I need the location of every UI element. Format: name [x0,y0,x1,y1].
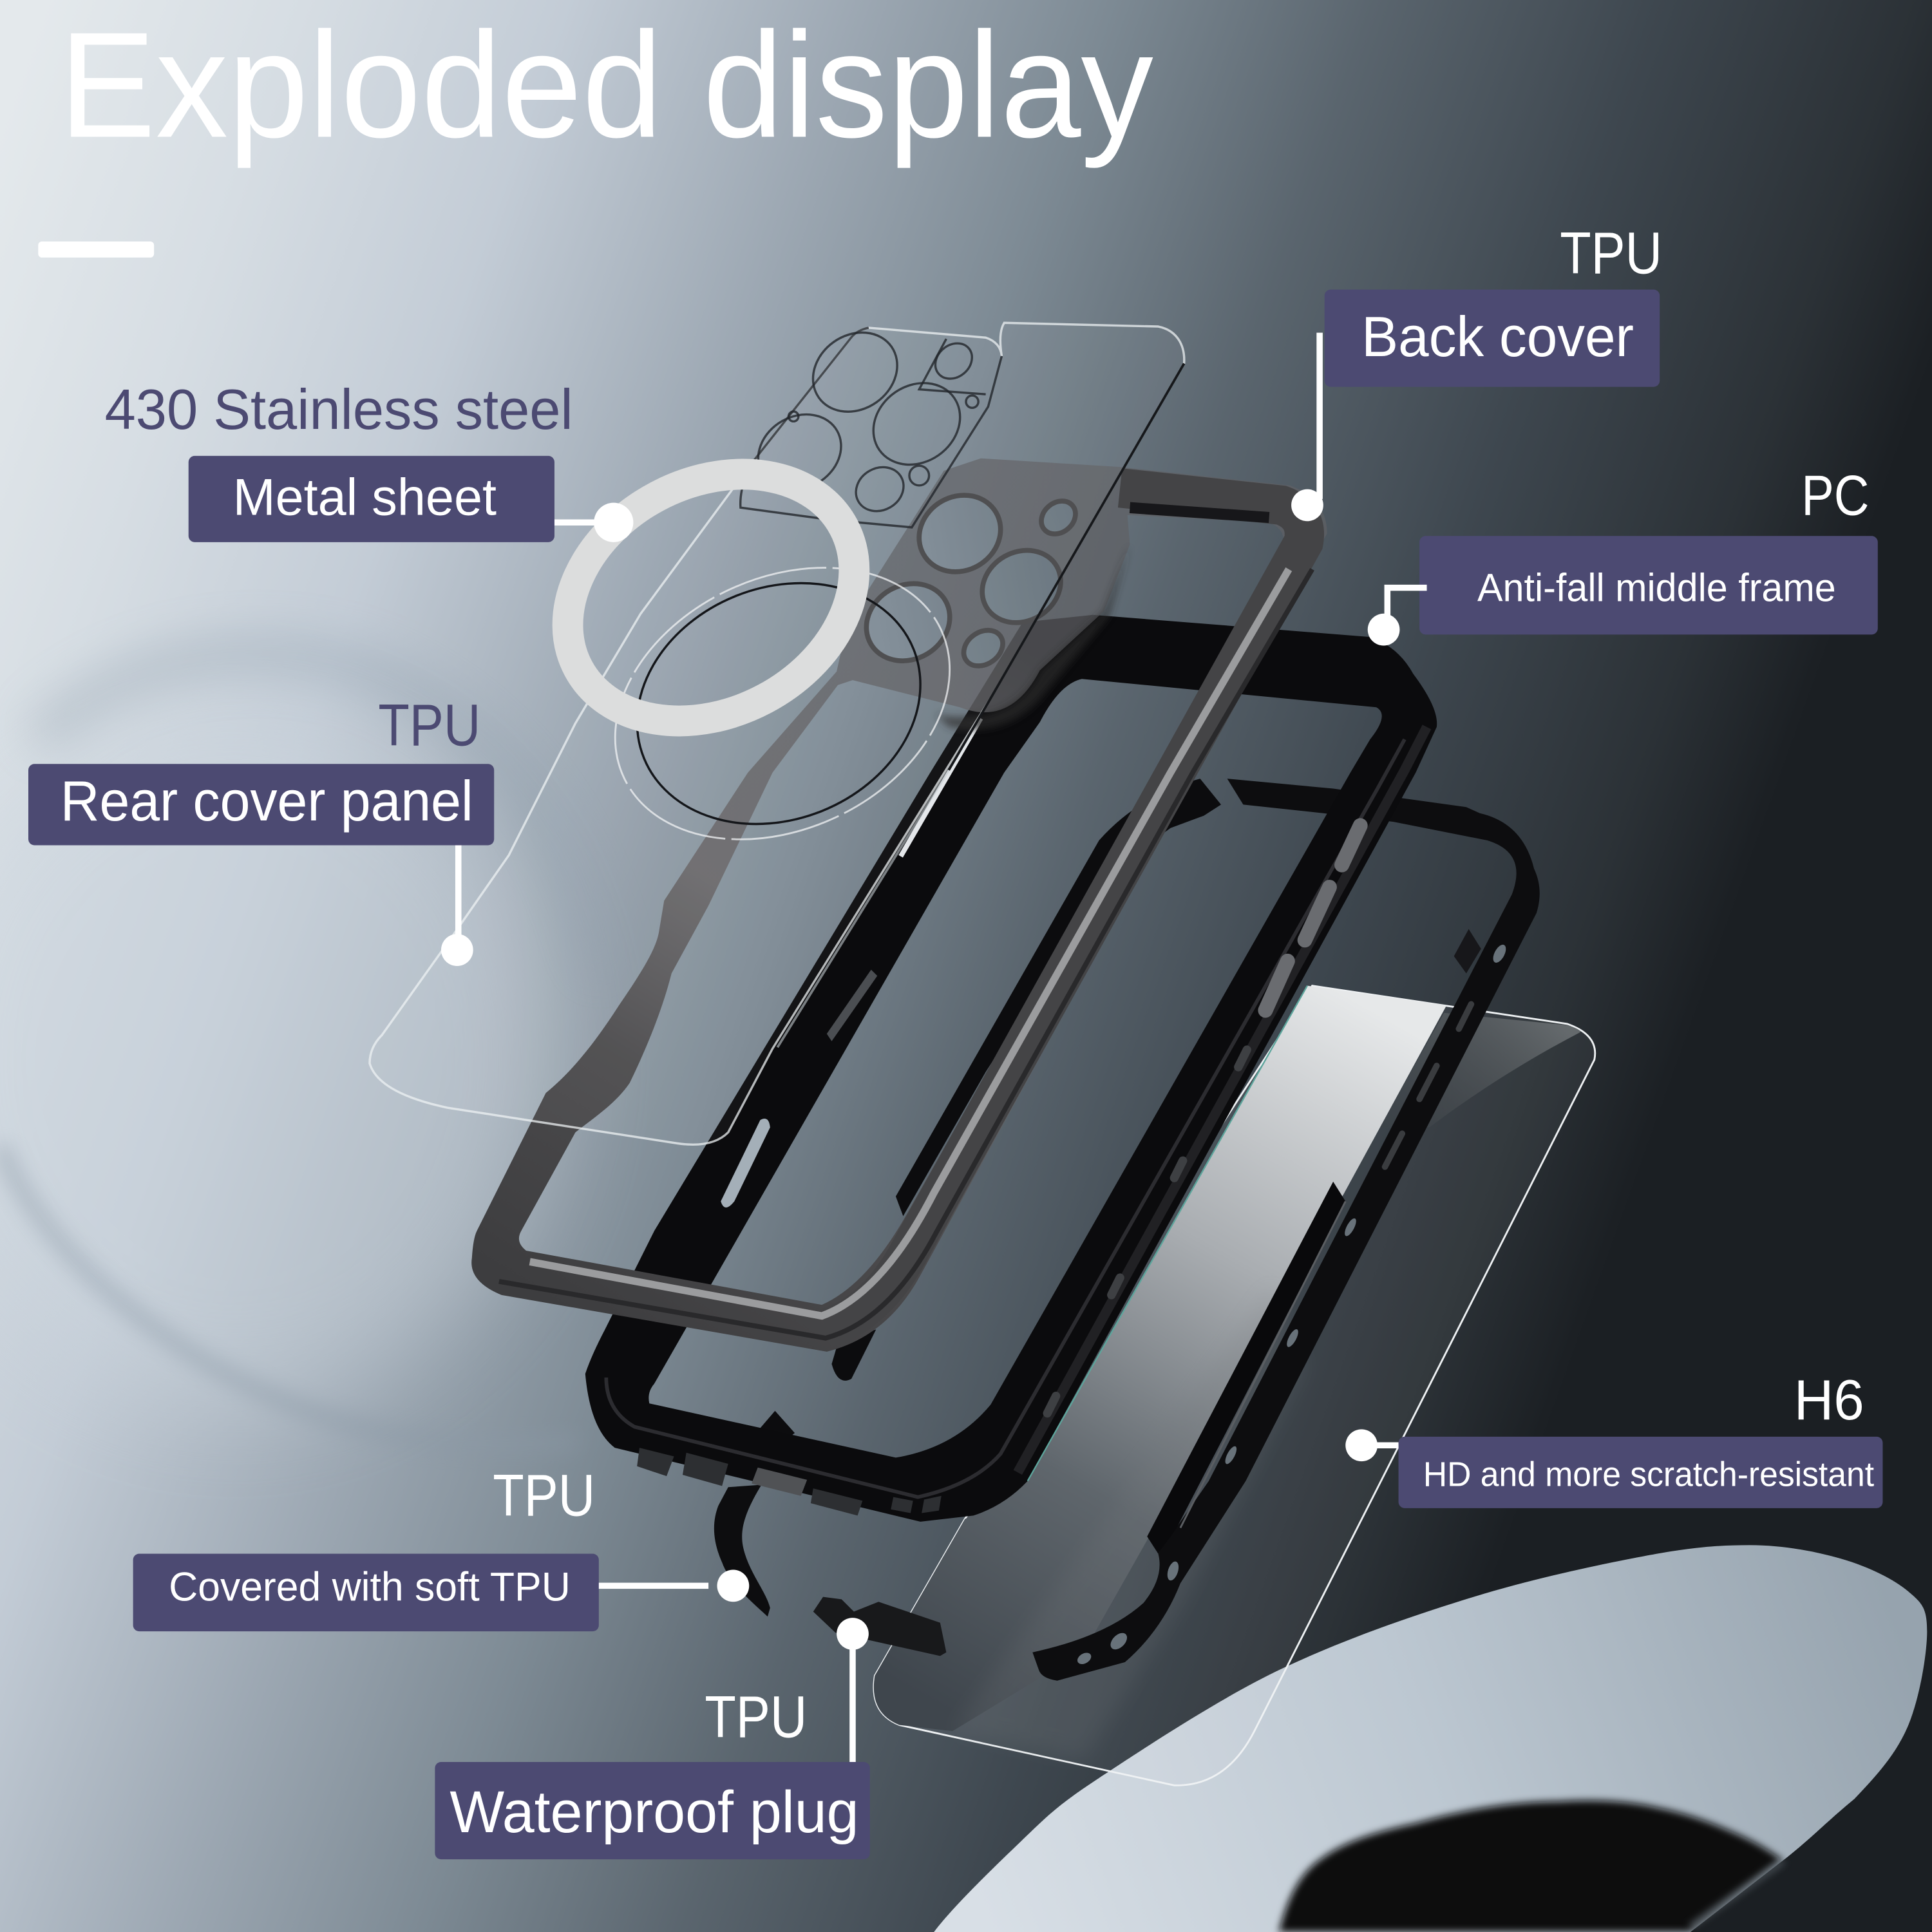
label box [435,1762,870,1859]
label text: Waterproof plug [450,1779,859,1845]
leader line [599,1584,708,1587]
small side buttons [1047,1050,1247,1414]
anchor dot [1291,489,1323,521]
rail grips [1385,1004,1471,1167]
glass upper corner highlight [1380,1013,1580,1128]
grey side pills [1265,826,1360,1010]
label text: Rear cover panel [61,769,473,833]
rail dark groove [499,569,1312,1338]
label box [28,764,494,845]
material label: TPU [1560,221,1662,287]
callout: waterproof plug [435,1618,870,1859]
front frame inner strip [1147,1182,1345,1554]
front frame [760,779,1540,1681]
anchor dot [717,1570,749,1602]
rear cover camera cutouts [741,316,1001,527]
middle frame body [585,615,1437,1522]
leader line [554,521,614,524]
glass outline [874,986,1595,1785]
anti-fall middle frame [585,615,1437,1522]
frame tabs [1454,929,1481,973]
bottom grey pill [752,1468,807,1496]
material label: 430 Stainless steel [105,377,573,441]
back cover frame body [471,459,1327,1352]
callout: soft TPU [133,1463,749,1631]
label box [189,456,554,542]
teal edge line [1028,986,1307,1481]
label box [1419,536,1878,634]
callout: back cover [1291,221,1662,521]
leader line [1318,333,1321,499]
left rail light slot [721,1119,770,1208]
right and top rail solid band [826,488,1304,1328]
rear cover transparent panel [370,316,1184,1144]
camera holes [852,480,1082,676]
leader line [457,845,460,949]
middle frame edge detail [606,739,1405,1497]
material label: TPU [705,1685,807,1750]
camera plate shade [936,545,1130,730]
anchor dot [1345,1429,1378,1461]
anchor dot [594,503,633,542]
front frame main piece [1032,779,1540,1681]
material label: TPU [378,693,480,759]
title: Exploded display [59,1,1153,169]
tempered glass screen protector [874,986,1595,1785]
plate dark shape [1279,1801,1783,1932]
label box [1399,1437,1882,1508]
leader line [1387,588,1427,629]
rear cover dark right edge [949,363,1184,770]
label box [133,1554,599,1631]
leader line [851,1639,854,1762]
callout: rear cover panel [28,693,494,966]
leader line [1361,1444,1399,1447]
label text: Back cover [1361,305,1634,368]
rail light strip [530,569,1289,1316]
waterproof plug part [813,1597,946,1656]
anchor dot [1368,614,1399,646]
material label: H6 [1794,1368,1864,1432]
title underline bar [38,242,154,258]
anchor dot [441,934,473,966]
material label: PC [1801,464,1869,527]
bottom right light plate [934,1545,1927,1932]
callout: screen glass [1345,1368,1882,1508]
label text: Covered with soft TPU [169,1564,571,1609]
frame dark inner lip [1130,507,1269,518]
label text: HD and more scratch-resistant [1423,1455,1874,1493]
label text: Anti-fall middle frame [1477,566,1836,610]
metal sheet ring [524,426,898,770]
front frame left rail [896,779,1221,1216]
magsafe magnet outline rings [571,516,994,891]
glass soft band [952,1287,1306,1759]
rear cover outline [370,323,1184,1144]
side holes [1075,943,1508,1667]
callout: middle frame [1368,464,1878,646]
glass bright reflection [874,986,1446,1731]
label box [1325,290,1660,387]
left rail grey slot [827,970,877,1041]
callout: metal sheet [105,377,633,542]
lower left soft hook [714,1484,770,1616]
anchor dot [837,1618,869,1650]
material label: TPU [493,1463,595,1528]
bottom ports [637,1448,942,1515]
back cover TPU frame [471,459,1327,1352]
label text: Metal sheet [233,469,497,527]
